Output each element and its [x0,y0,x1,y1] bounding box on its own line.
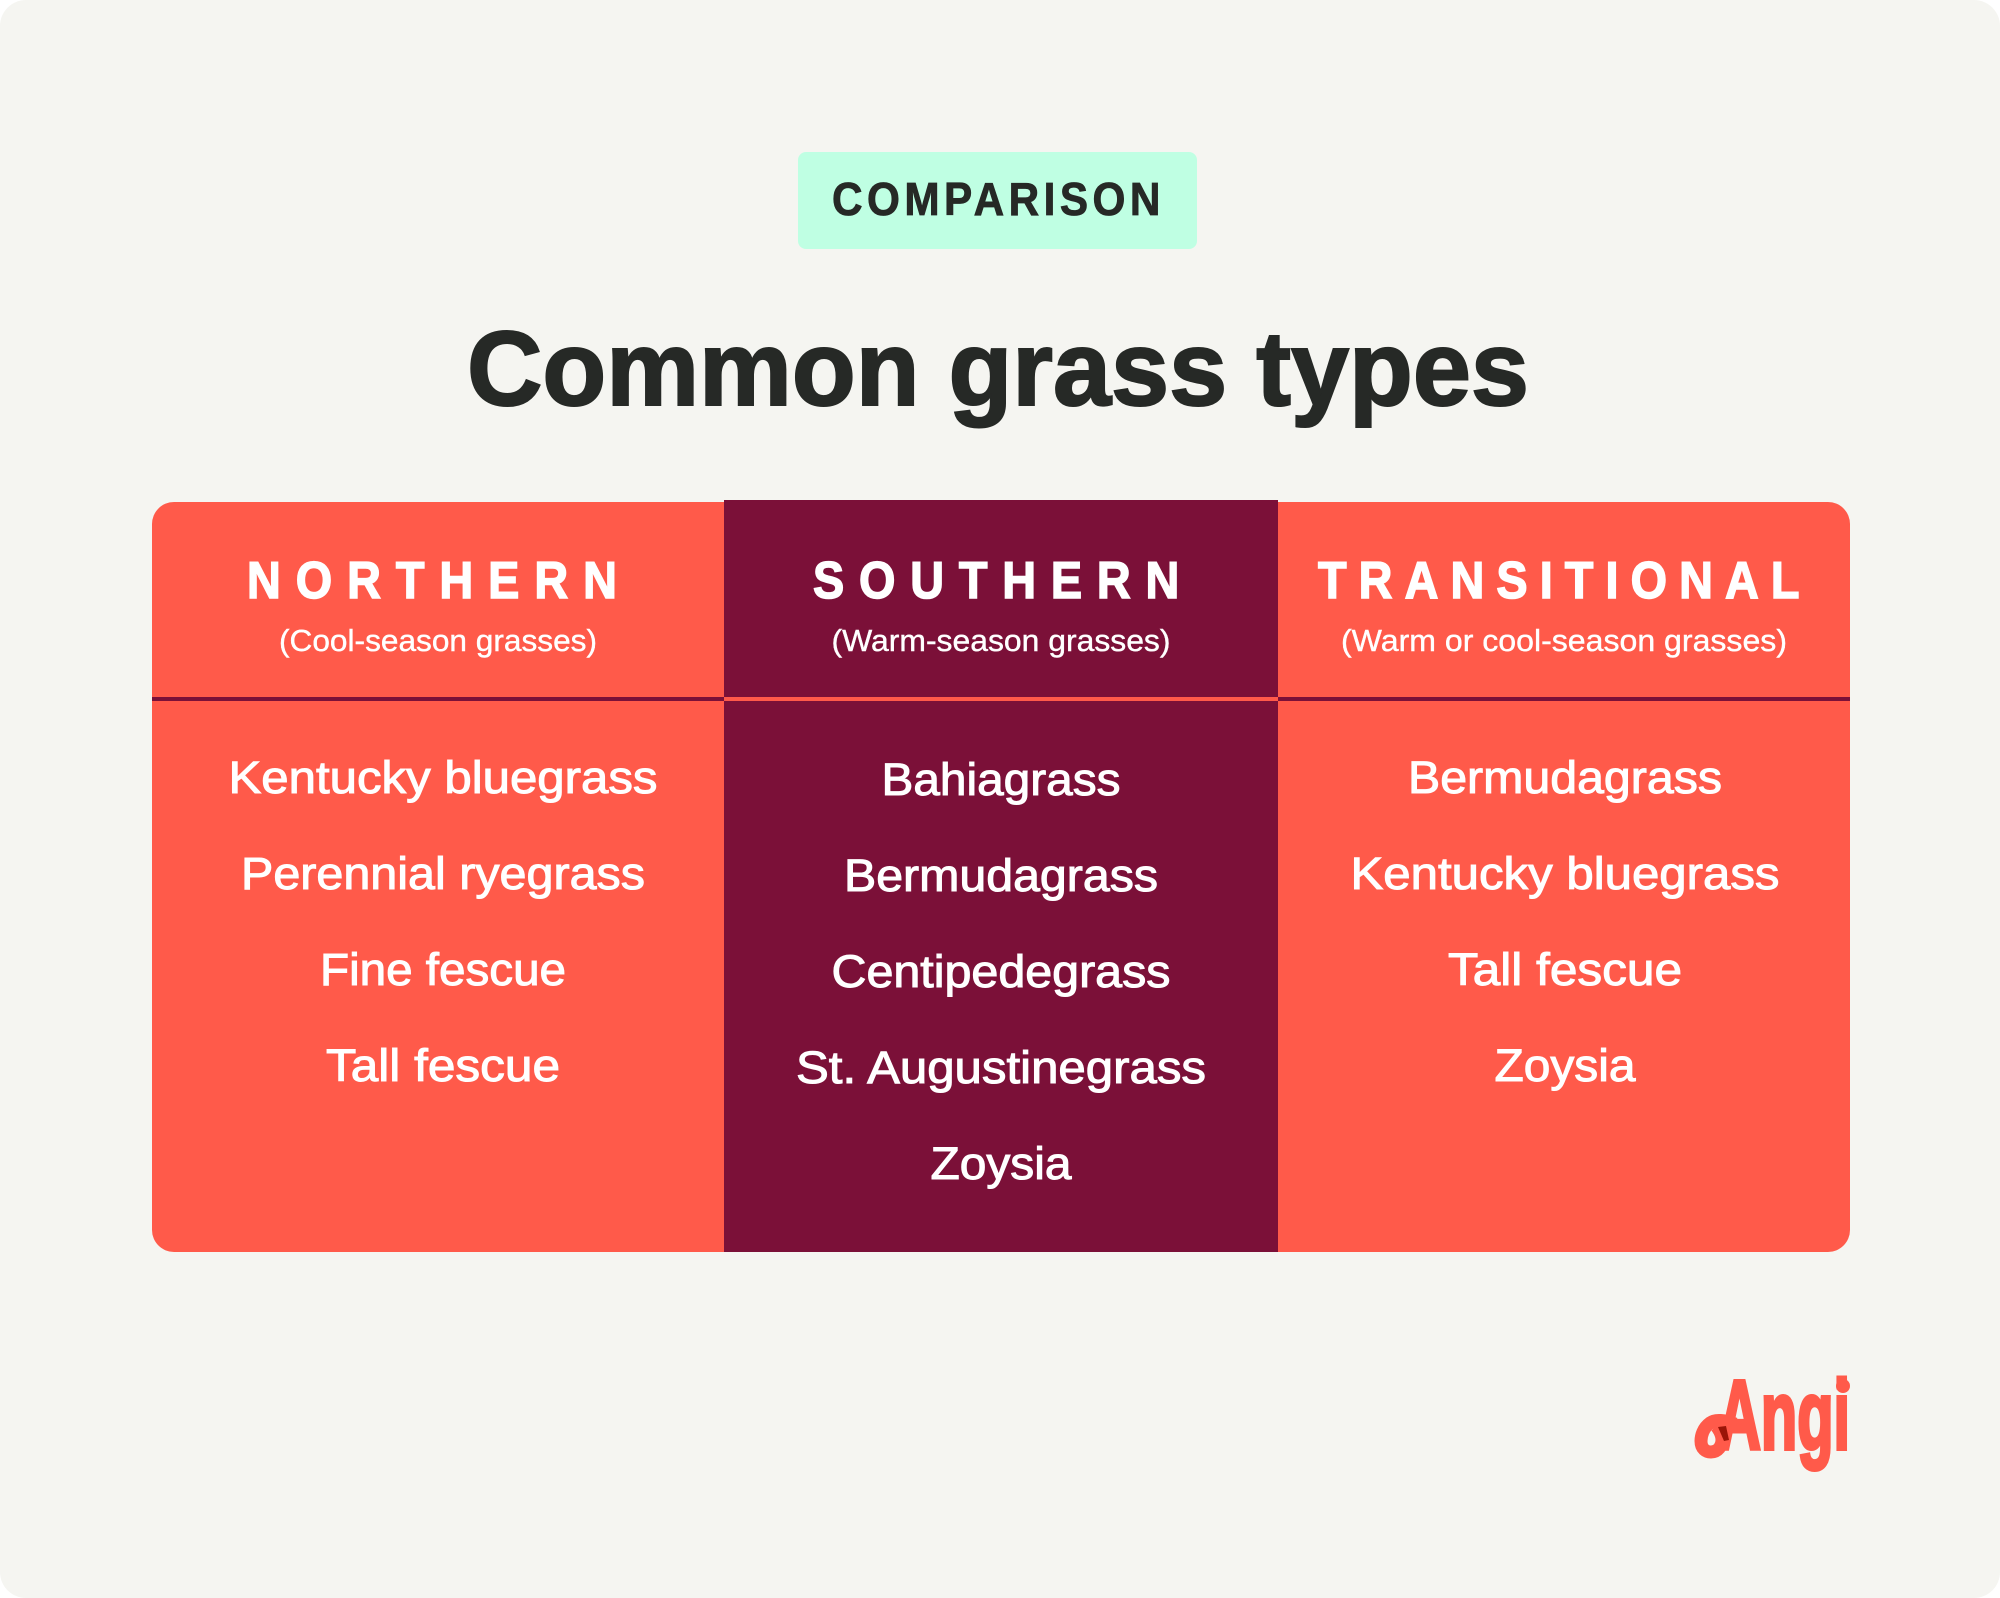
column: southern [724,552,1278,1189]
list: northern grasses: Kentucky bluegrass [228,752,658,803]
badge: comparison [798,152,1197,249]
column: transitional [1278,552,1850,1091]
heading: southern: SOUTHERN [813,552,1179,610]
panel: southern column background [724,500,1278,1252]
list: southern grasses: Centipedegrass [832,946,1170,997]
title: Common grass types [467,310,1529,428]
list: transitional grasses: Kentucky bluegrass [1350,848,1780,899]
heading: northern: NORTHERN [247,552,617,610]
list: transitional grasses: Bermudagrass [1408,752,1722,803]
heading: transitional: TRANSITIONAL [1318,552,1800,610]
panel: table background [152,502,1850,1252]
list: southern grasses: Bermudagrass [844,850,1158,901]
list: northern grasses: Fine fescue [320,944,566,995]
divider: northern [152,697,724,701]
list: southern grasses: St. Augustinegrass [796,1042,1206,1093]
list: transitional grasses [1350,752,1780,1091]
list: southern grasses [796,754,1206,1189]
subheading: southern: (Warm-season grasses) [832,623,1170,658]
list: transitional grasses: Zoysia [1494,1040,1637,1091]
logo: Angi [1701,1360,1850,1470]
list: southern grasses: Zoysia [930,1138,1073,1189]
badge: comparison: COMPARISON [832,174,1160,225]
list: southern grasses: Bahiagrass [882,754,1120,805]
list: northern grasses [228,752,658,1091]
list: transitional grasses: Tall fescue [1448,944,1682,995]
column: northern [152,552,724,1091]
divider: transitional [1278,697,1850,701]
list: northern grasses: Perennial ryegrass [241,848,645,899]
subheading: northern: (Cool-season grasses) [279,623,597,658]
list: northern grasses: Tall fescue [326,1040,560,1091]
logo: Angi: Angi [1718,1360,1850,1470]
divider: southern [724,697,1278,701]
comparison table [152,500,1850,1252]
subheading: transitional: (Warm or cool-season grasses) [1341,623,1787,658]
